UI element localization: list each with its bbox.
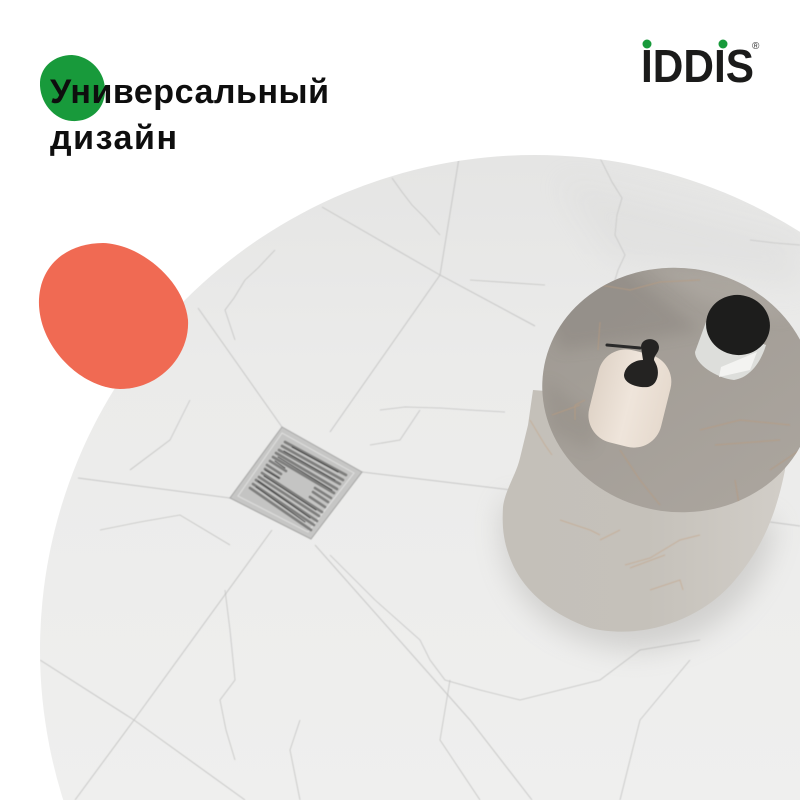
soap dispenser [588, 339, 672, 448]
marble veins [100, 158, 800, 800]
floor tile joints [40, 158, 800, 800]
title [50, 73, 329, 157]
title: Универсальный [50, 73, 329, 111]
title: дизайн [50, 119, 177, 157]
cosmetic jar [695, 294, 770, 380]
logo: IDDIS: IDDIS [641, 40, 754, 92]
coral blob [39, 243, 188, 389]
floor drain [230, 427, 362, 539]
table base [503, 390, 790, 632]
table top disc [542, 268, 800, 512]
green blob [40, 55, 105, 121]
logo: IDDIS: ® [752, 41, 760, 52]
stone side table [503, 250, 800, 632]
table shadow on floor [502, 500, 775, 650]
